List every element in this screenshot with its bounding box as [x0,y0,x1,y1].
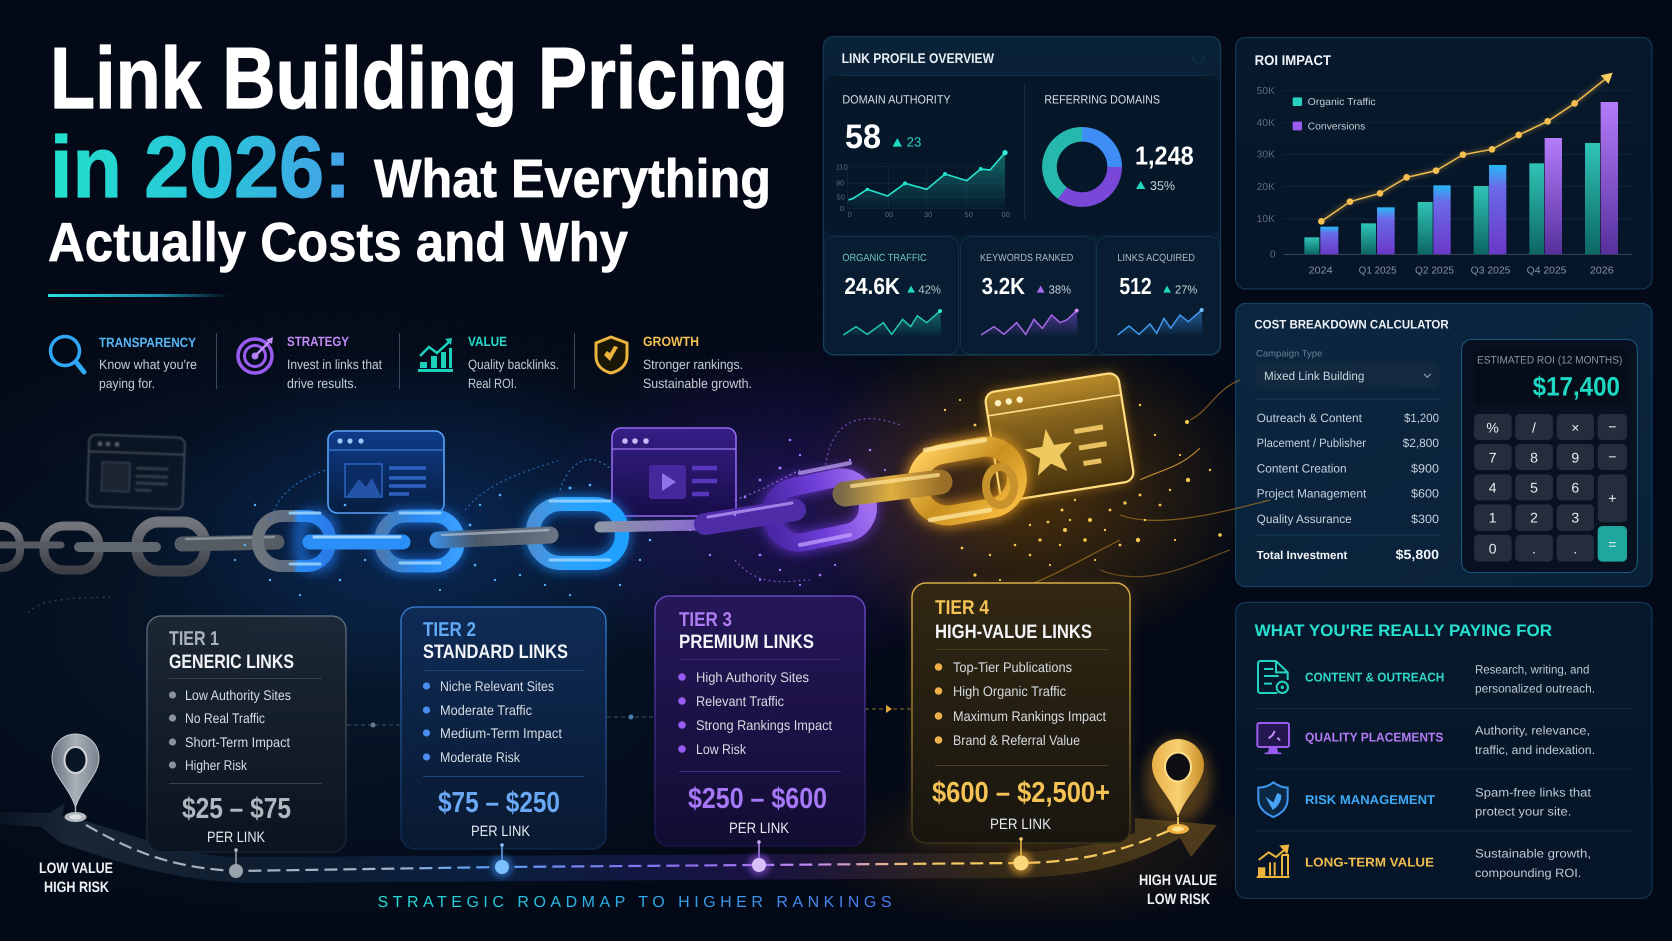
tier heading [423,619,568,663]
key labels: = [1608,536,1616,552]
icon: gold browser window [984,372,1135,502]
title [48,30,788,273]
legend: Organic Traffic [1308,96,1376,107]
cost rows: $2,800 [1403,436,1439,450]
key labels: 9 [1571,450,1579,465]
label: low value high risk: LOW VALUE [39,860,113,877]
key labels: 0 [1489,541,1497,556]
feature list: No Real Traffic [185,710,265,726]
feature: growth [643,334,752,391]
icon: blue browser window [328,431,444,513]
tier heading: HIGH-VALUE LINKS [935,621,1092,643]
feature list: Low Authority Sites [185,687,291,703]
tier heading: GENERIC LINKS [169,651,294,673]
price [688,783,827,837]
cost rows: $1,200 [1404,411,1439,425]
price: $600 – $2,500+ [932,777,1110,809]
referring domains [1044,92,1194,200]
label: high value low risk [1139,872,1217,908]
icon: monitor [1257,723,1289,753]
dashed route [86,825,1175,871]
feature: strategy: drive results. [287,376,357,391]
row: long-term value: Sustainable growth, [1475,847,1591,860]
feature list: Maximum Rankings Impact [953,708,1106,724]
title line 3: Actually Costs and Why [48,211,628,273]
x axis labels: Q2 2025 [1415,265,1454,276]
card: links acquired: 27% [1175,283,1197,296]
feature list [423,678,562,765]
feature: transparency: Know what you're [99,357,197,372]
tier heading: TIER 2 [423,619,476,641]
domain authority: 23 [907,135,921,150]
cost rows: Content Creation [1257,461,1347,475]
campaign type select: Mixed Link Building [1264,369,1364,383]
key labels: 5 [1530,480,1538,495]
roadmap caption: STRATEGIC ROADMAP TO HIGHER RANKINGS [378,894,892,911]
row: quality placements: QUALITY PLACEMENTS [1305,731,1443,745]
bar and line chart: 20K [1257,181,1275,192]
link highlights [290,501,610,564]
row: content and outreach: Research, writing, and [1475,662,1589,676]
icon: gray browser window [87,434,185,510]
icon: shield [596,337,627,373]
feature list: Short-Term Impact [185,734,290,750]
cost rows: $900 [1411,461,1439,475]
key labels: 6 [1571,480,1579,495]
panel: what you're really paying for [1236,602,1652,898]
legend: Conversions [1308,121,1365,132]
area line chart: 90 [836,179,844,187]
key labels: 3 [1571,510,1579,526]
donut chart [1049,134,1115,200]
key labels: 2 [1530,510,1538,526]
x axis labels: Q3 2025 [1471,265,1510,276]
purple links [600,463,873,547]
price: $250 – $600 [688,783,827,815]
x axis labels: Q1 2025 [1359,265,1397,276]
price [438,787,560,840]
referring domains: 1,248 [1135,141,1194,170]
feature list: Strong Rankings Impact [696,717,832,733]
key labels: / [1532,420,1536,435]
card: keywords ranked: 38% [1049,283,1071,296]
sparks [234,380,1270,596]
key labels: . [1573,541,1577,556]
area line chart: 110 [836,163,848,171]
glow layer [300,442,1022,566]
pin: high value [1144,738,1212,834]
row: content and outreach [1258,661,1595,695]
calculator: $17,400 [1533,372,1620,401]
tier 4 card [912,583,1130,843]
x axis labels: Q4 2025 [1527,265,1566,276]
price [182,793,291,846]
feature: strategy: STRATEGY [287,334,349,349]
cost rows: Quality Assurance [1257,512,1352,526]
area line chart: 0 [848,210,852,219]
price: PER LINK [990,816,1051,833]
card: organic traffic: ORGANIC TRAFFIC [842,252,927,263]
growth line [1318,73,1613,225]
calculator [1462,339,1637,573]
bars [1304,102,1618,254]
key labels: 7 [1489,450,1497,465]
feature list: Top-Tier Publications [953,659,1072,675]
bar and line chart: 0 [1270,249,1276,260]
feature: value: Real ROI. [468,376,517,391]
row: risk management: Spam-free links that [1475,785,1591,799]
panel heading: ROI IMPACT [1255,52,1331,68]
card: organic traffic [824,237,959,354]
feature list [935,659,1106,748]
feature list: Relevant Traffic [696,693,784,709]
roadmap arrow [0,803,1217,883]
panel heading: LINK PROFILE OVERVIEW [842,50,994,66]
icon: growth chart [1257,846,1289,877]
feature: transparency: paying for. [99,376,155,391]
key labels: + [1608,490,1616,506]
card: keywords ranked [961,237,1096,354]
feature list: High Authority Sites [696,669,809,685]
card: keywords ranked: 3.2K [982,273,1025,299]
card: links acquired [1097,237,1220,354]
row: risk management: RISK MANAGEMENT [1305,793,1435,807]
feature list: Medium-Term Impact [440,725,562,741]
price: $75 – $250 [438,787,560,819]
x axis labels: 2026 [1590,265,1614,276]
tier heading: PREMIUM LINKS [679,631,814,653]
icon: target [238,337,273,373]
feature: value [468,334,559,391]
card: links acquired: LINKS ACQUIRED [1117,252,1195,263]
feature: value: Quality backlinks. [468,357,559,372]
bar and line chart: 50K [1257,85,1275,96]
feature list: Moderate Risk [440,749,521,765]
feature: transparency [99,335,197,391]
referring domains: 35% [1150,179,1175,193]
feature: growth: Stronger rankings. [643,357,743,372]
key labels: 1 [1489,510,1497,526]
feature row [50,333,752,391]
row: content and outreach: personalized outreach. [1475,681,1595,695]
domain authority: DOMAIN AUTHORITY [842,92,951,106]
domain authority [836,92,1010,219]
bar and line chart [1257,73,1633,276]
feature list: Niche Relevant Sites [440,678,554,694]
legend [1293,96,1376,132]
panel heading: COST BREAKDOWN CALCULATOR [1254,317,1449,331]
title year: in 2026: [50,119,351,216]
cost rows: $300 [1411,512,1439,526]
feature list: Higher Risk [185,757,248,773]
keypad [1474,414,1627,562]
tier 3 card [655,596,865,846]
label: high value low risk: HIGH VALUE [1139,872,1217,889]
row: quality placements [1257,723,1595,757]
price [932,777,1110,833]
panel: cost breakdown calculator [1236,303,1652,587]
panel: roi impact [1236,37,1652,289]
referring domains: REFERRING DOMAINS [1044,92,1160,106]
row: risk management: protect your site. [1475,805,1571,818]
key labels: 4 [1489,480,1497,495]
tier heading [169,628,294,673]
card: organic traffic: 42% [918,283,941,296]
row: long-term value: compounding ROI. [1475,866,1581,880]
area line chart: 0 [840,204,844,213]
bar and line chart: 30K [1257,149,1275,160]
icon: magnifier [50,336,84,372]
card: organic traffic: 24.6K [844,273,900,299]
key labels: − [1608,419,1616,435]
inner dark area [824,76,1220,234]
gold links [845,440,1022,520]
cost rows: Outreach & Content [1257,411,1362,425]
tier 1 card [147,616,346,852]
row: quality placements: Authority, relevance, [1475,724,1590,737]
key labels: 8 [1530,450,1538,465]
row: long-term value: LONG-TERM VALUE [1305,855,1434,869]
tier heading: TIER 4 [935,597,990,619]
total: $5,800 [1396,547,1439,562]
row: content and outreach: CONTENT & OUTREACH [1305,671,1444,685]
price: $25 – $75 [182,793,291,825]
card: keywords ranked: KEYWORDS RANKED [980,252,1073,263]
feature: strategy [287,334,382,391]
panel: link profile overview [823,37,1221,355]
row: quality placements: traffic, and indexation. [1475,743,1595,757]
price: PER LINK [471,823,530,840]
tier heading [935,597,1092,643]
feature list [678,669,832,757]
feature list: High Organic Traffic [953,683,1066,699]
campaign type select [1255,348,1440,388]
cost rows: Placement / Publisher [1257,436,1366,450]
card: links acquired: 512 [1119,273,1152,299]
gray links [0,522,277,571]
tier heading [679,609,814,653]
pin: low value [52,734,99,822]
feature: strategy: Invest in links that [287,357,382,372]
key labels: − [1608,449,1616,465]
title line 2: What Everything [374,149,771,209]
feature list: Low Risk [696,741,747,757]
tier heading: STANDARD LINKS [423,641,568,663]
bar and line chart: 10K [1257,213,1275,224]
feature: value: VALUE [468,334,507,349]
label: low value high risk [39,860,113,896]
icon: shield [1258,782,1288,817]
title line 1: Link Building Pricing [50,30,788,127]
calculator: ESTIMATED ROI (12 MONTHS) [1477,354,1622,366]
roadmap nodes [229,837,1033,878]
tier 2 card [401,607,606,849]
icon: document [1258,661,1288,693]
total: Total Investment [1257,549,1347,562]
area line chart: 00 [1002,210,1010,219]
feature list: Brand & Referral Value [953,732,1080,748]
icon: purple browser window [612,428,736,516]
area line chart: 30 [924,210,932,219]
cost rows: Project Management [1257,487,1366,500]
price: PER LINK [207,829,265,846]
cost rows [1257,411,1439,526]
key labels: % [1486,420,1499,435]
area line chart: 50 [837,193,845,201]
panel heading: WHAT YOU'RE REALLY PAYING FOR [1255,621,1552,640]
feature list: Moderate Traffic [440,702,532,718]
row: risk management [1258,782,1591,818]
label: low value high risk: HIGH RISK [44,879,109,896]
feature list [169,687,291,773]
tier heading: TIER 3 [679,609,732,631]
bar and line chart: 40K [1257,117,1275,128]
x axis labels [1309,265,1614,276]
total [1257,547,1439,562]
area line chart: 00 [885,210,893,219]
chain illustration [0,440,1022,571]
x axis labels: 2024 [1309,265,1333,276]
area line chart: 50 [965,210,973,219]
feature: transparency: TRANSPARENCY [99,335,196,350]
area line chart [836,150,1010,219]
blue links [258,501,622,566]
cost rows: $600 [1411,487,1439,500]
key labels: . [1532,541,1536,556]
icon: growth chart [418,338,453,372]
row: long-term value [1257,846,1591,880]
price: PER LINK [729,820,789,837]
feature: growth: Sustainable growth. [643,376,752,391]
key labels [1486,419,1616,556]
label: high value low risk: LOW RISK [1147,891,1210,908]
tier heading: TIER 1 [169,628,219,650]
key labels: × [1571,420,1579,435]
feature: growth: GROWTH [643,334,699,349]
campaign type select: Campaign Type [1256,348,1322,359]
domain authority: 58 [845,117,881,155]
